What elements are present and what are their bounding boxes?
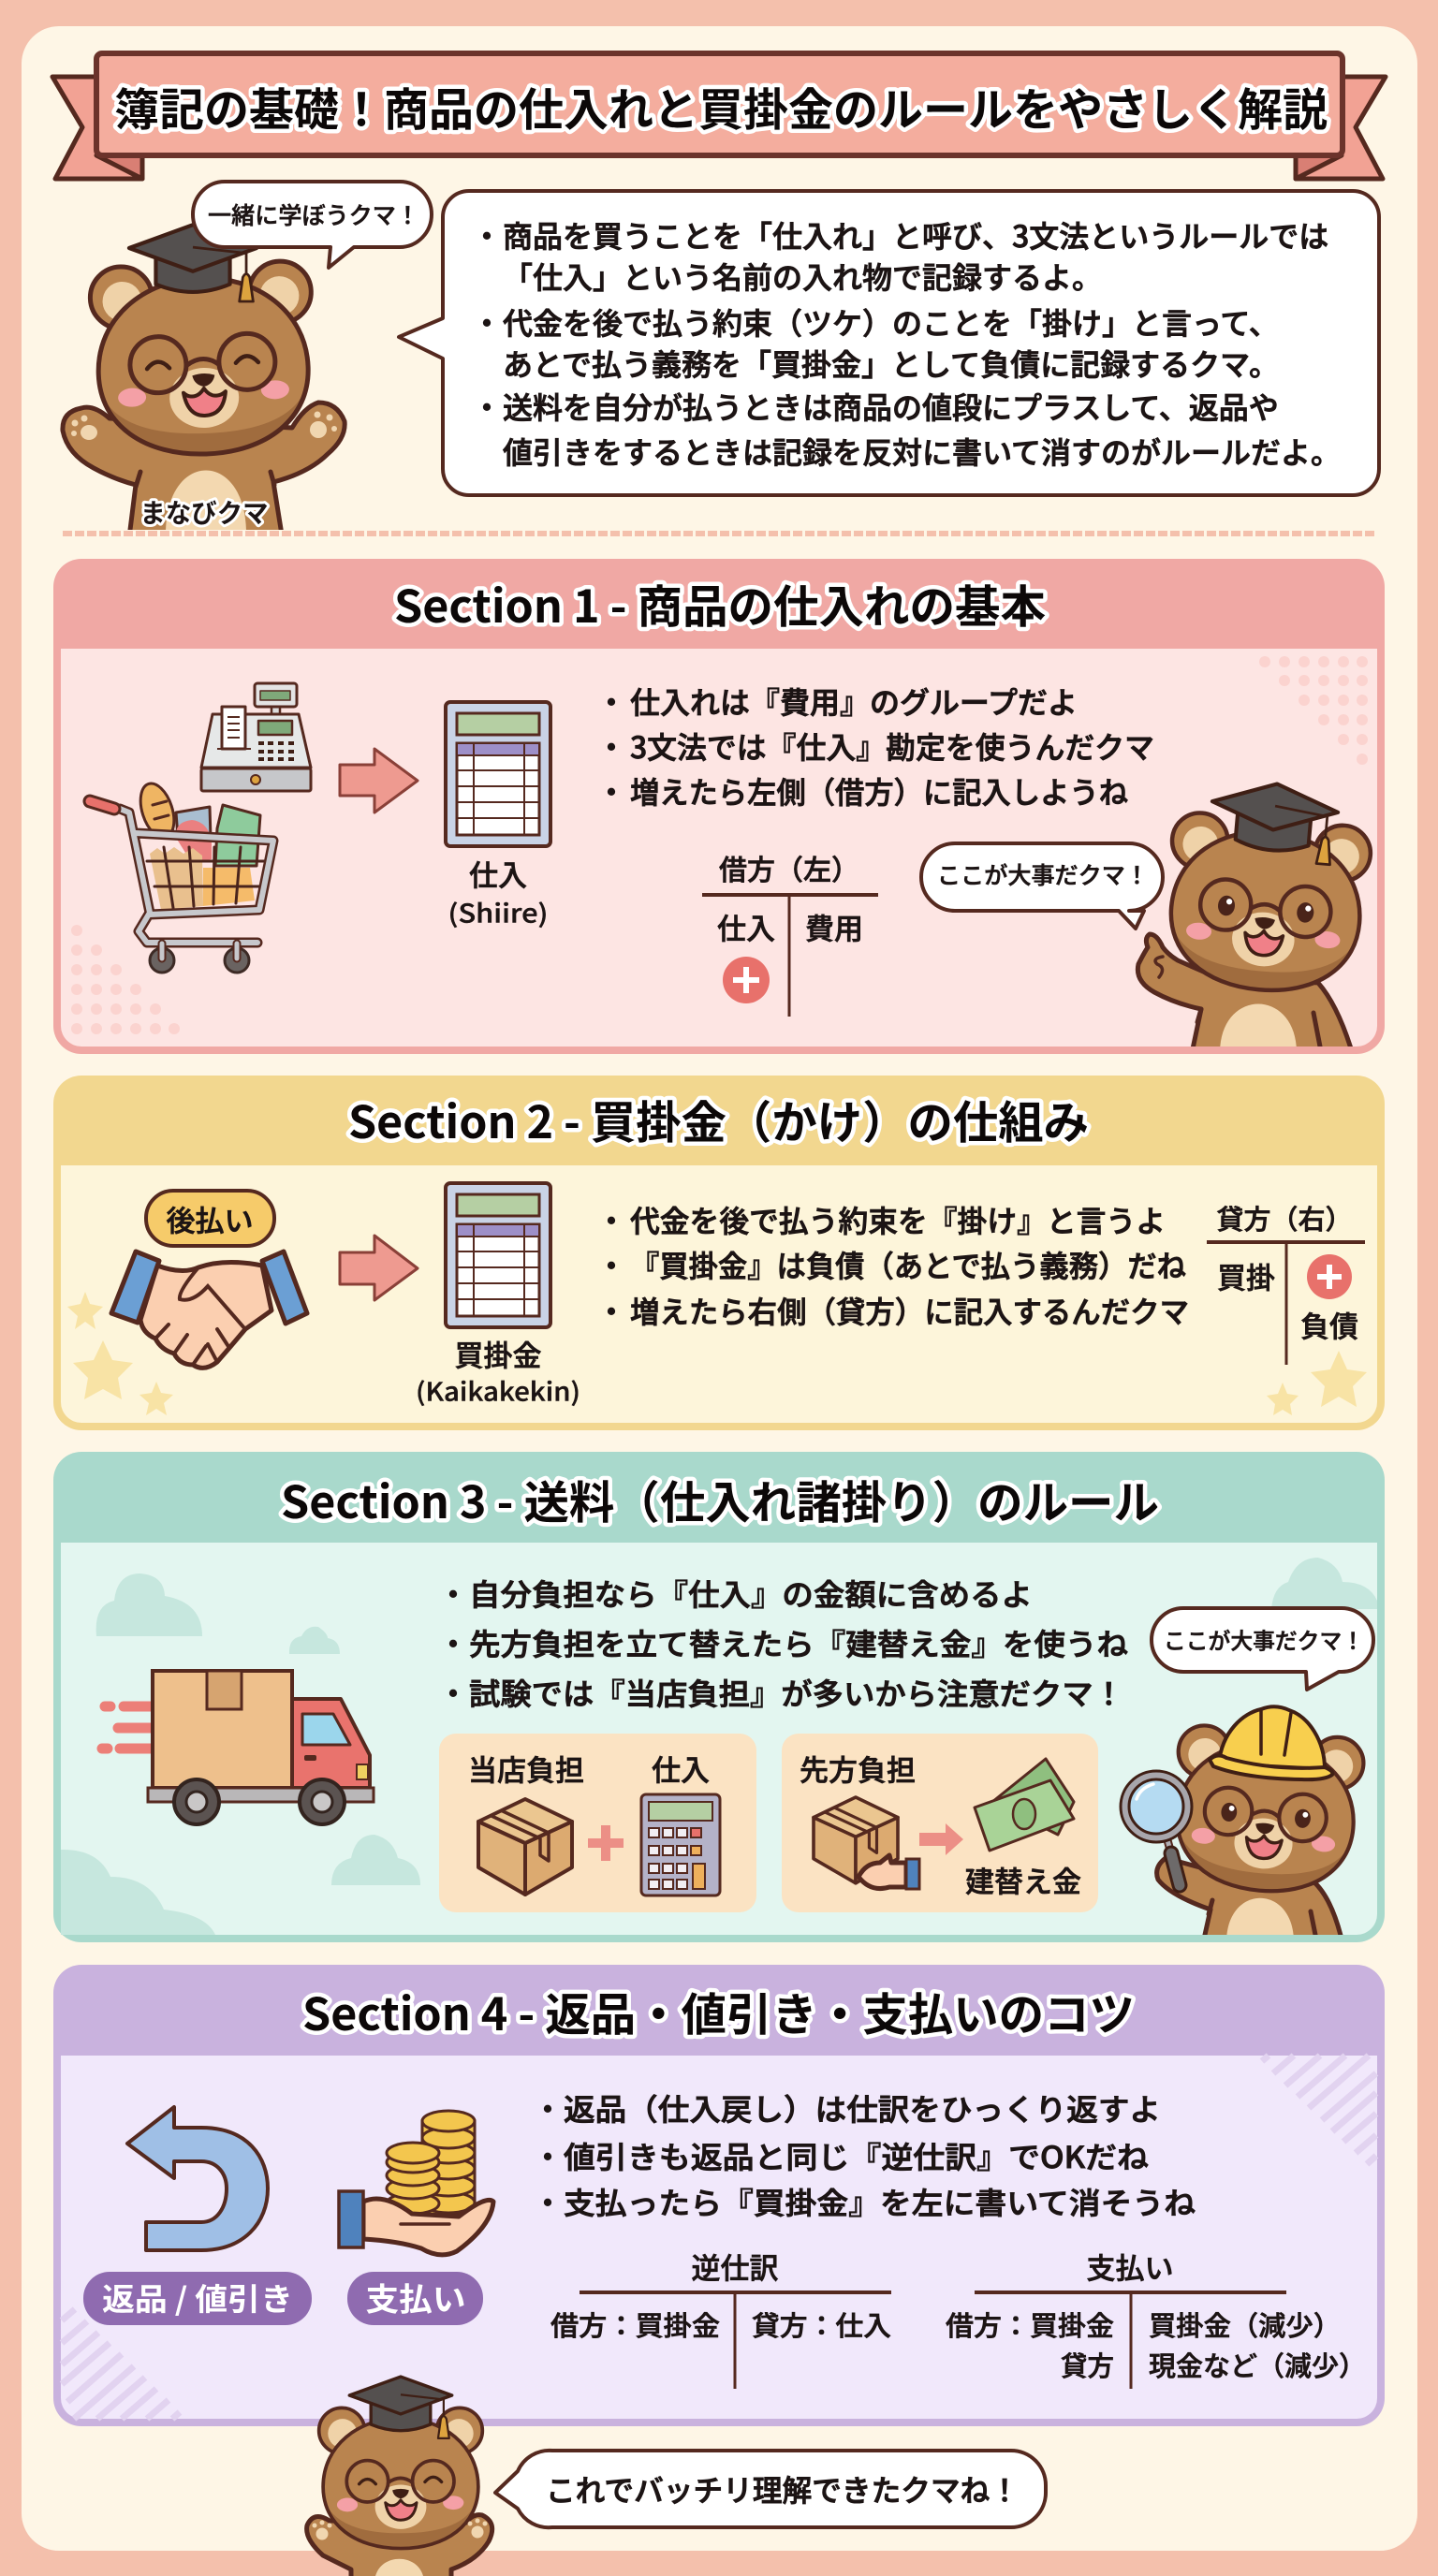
bullets: 試験では『当店負担』が多いから注意だクマ！ xyxy=(469,1671,1124,1714)
T account: payment: 支払い xyxy=(1086,2245,1174,2288)
arrow xyxy=(340,1236,418,1300)
mascot: manabi bear xyxy=(63,225,345,552)
speech bubble: let's learn: 一緒に学ぼうクマ！ xyxy=(208,198,419,231)
T account: payment: 現金など（減少） xyxy=(1149,2345,1366,2384)
pill: payment xyxy=(347,2272,483,2325)
icon: return arrow xyxy=(127,2107,268,2250)
T account: reverse entry xyxy=(550,2245,891,2389)
speech bubble: let's learn xyxy=(193,182,432,268)
bullets: ・ xyxy=(596,1289,626,1332)
T account: credit: 買掛 xyxy=(1217,1254,1275,1297)
bullets: 増えたら左側（借方）に記入しようね xyxy=(630,769,1128,812)
name label: まなびクマ xyxy=(140,493,268,531)
title text: 簿記の基礎！商品の仕入れと買掛金のルールをやさしく解説 xyxy=(114,73,1328,139)
bullets: 代金を後で払う約束を『掛け』と言うよ xyxy=(630,1198,1166,1241)
T account: reverse entry: 借方：買掛金 xyxy=(550,2305,720,2344)
intro speech bubble: 代金を後で払う約束（ツケ）のことを「掛け」と言って、 xyxy=(503,300,1279,344)
mascot: closing bear xyxy=(307,2377,492,2576)
speech bubble: ここが大事だクマ！ xyxy=(1164,1623,1364,1655)
pill: deferred payment xyxy=(146,1191,274,1246)
intro speech bubble xyxy=(399,191,1379,495)
panel: section 3 xyxy=(53,1452,1385,1952)
pill: returns and discounts: 返品 / 値引き xyxy=(102,2275,293,2320)
icon: cash register xyxy=(201,683,311,791)
ledger label: 買掛金 xyxy=(455,1333,541,1374)
intro speech bubble: 商品を買うことを「仕入れ」と呼び、3文法というルールでは xyxy=(503,213,1328,256)
card: other party expense: 先方負担 xyxy=(800,1747,916,1790)
bullets: ・ xyxy=(596,1198,626,1241)
icon: shopping cart xyxy=(90,780,273,973)
bullets xyxy=(533,2086,1196,2223)
bullets: ・ xyxy=(596,680,626,723)
bullets: 3文法では『仕入』勘定を使うんだクマ xyxy=(630,724,1154,768)
card: own expense: 当店負担 xyxy=(468,1747,584,1790)
arrow xyxy=(340,749,418,812)
mascot: bear with helmet and magnifier xyxy=(1121,1706,1366,1952)
icon: coins in hand xyxy=(339,2111,493,2255)
icon: delivery truck xyxy=(102,1671,374,1824)
bullets: 値引きも返品と同じ『逆仕訳』でOKだね xyxy=(564,2134,1149,2177)
ledger label xyxy=(448,852,549,930)
card: other party expense xyxy=(782,1734,1098,1912)
bullets: ・ xyxy=(438,1621,468,1664)
intro speech bubble: あとで払う義務を「買掛金」として負債に記録するクマ。 xyxy=(503,342,1279,385)
bullets: 『買掛金』は負債（あとで払う義務）だね xyxy=(630,1243,1186,1286)
bullets: 先方負担を立て替えたら『建替え金』を使うね xyxy=(469,1621,1128,1664)
T account: payment: 貸方 xyxy=(1061,2345,1114,2384)
intro speech bubble: ・ xyxy=(472,213,502,256)
T account: payment: 買掛金（減少） xyxy=(1149,2305,1341,2344)
bullets xyxy=(596,680,1154,812)
T account: credit: 負債 xyxy=(1300,1303,1358,1346)
T account: debit: 借方（左） xyxy=(719,847,859,888)
intro speech bubble: ・ xyxy=(472,385,502,428)
mascot: pointing bear xyxy=(1137,779,1372,1058)
card: other party expense: 建替え金 xyxy=(965,1859,1081,1900)
T account: debit: 仕入 xyxy=(717,906,775,947)
bullets: 増えたら右側（貸方）に記入するんだクマ xyxy=(630,1289,1189,1332)
panel: section 2 xyxy=(53,1076,1385,1430)
bullets xyxy=(596,1198,1189,1332)
bullets: ・ xyxy=(533,2134,563,2177)
icon: ledger xyxy=(446,702,550,846)
panel: section 4 xyxy=(53,1965,1385,2426)
bullets: ・ xyxy=(596,769,626,812)
heading: section 2: Section 2 - 買掛金（かけ）の仕組み xyxy=(348,1086,1089,1151)
ledger label: (Shiire) xyxy=(448,893,549,930)
T account: credit: 貸方（右） xyxy=(1216,1198,1353,1237)
title banner xyxy=(52,53,1386,179)
T account: payment xyxy=(946,2245,1366,2389)
T account: debit xyxy=(702,847,878,1017)
T account: debit: 費用 xyxy=(805,906,863,947)
pill: payment: 支払い xyxy=(365,2275,466,2320)
card: own expense: 仕入 xyxy=(652,1747,710,1790)
bullets: ・ xyxy=(438,1572,468,1615)
bullets: 返品（仕入戻し）は仕訳をひっくり返すよ xyxy=(564,2086,1161,2130)
bullets: 仕入れは『費用』のグループだよ xyxy=(630,680,1078,723)
ledger label: 仕入 xyxy=(469,852,527,895)
T account: reverse entry: 逆仕訳 xyxy=(691,2245,779,2288)
bullets: ・ xyxy=(596,724,626,768)
ledger label xyxy=(416,1333,580,1408)
bullets: ・ xyxy=(533,2180,563,2223)
speech bubble xyxy=(921,843,1163,929)
intro speech bubble: ・ xyxy=(472,300,502,344)
speech bubble xyxy=(1152,1608,1373,1690)
bullets: 自分負担なら『仕入』の金額に含めるよ xyxy=(469,1572,1033,1615)
bullets: 支払ったら『買掛金』を左に書いて消そうね xyxy=(564,2180,1196,2223)
T account: payment: 借方：買掛金 xyxy=(946,2305,1114,2344)
T account: reverse entry: 貸方：仕入 xyxy=(752,2305,891,2344)
heading: section 1: Section 1 - 商品の仕入れの基本 xyxy=(394,570,1046,636)
T account: credit xyxy=(1207,1198,1365,1365)
pill: returns and discounts xyxy=(83,2272,312,2325)
panel: section 1 xyxy=(53,559,1385,1058)
icon: handshake xyxy=(111,1251,307,1368)
speech bubble: ここが大事だクマ！ xyxy=(937,857,1149,891)
intro speech bubble: 「仕入」という名前の入れ物で記録するよ。 xyxy=(503,255,1102,298)
bullets: ・ xyxy=(596,1243,626,1286)
closing speech bubble: これでバッチリ理解できたクマね！ xyxy=(546,2467,1020,2510)
heading: section 3: Section 3 - 送料（仕入れ諸掛り）のルール xyxy=(281,1466,1159,1531)
bullets: ・ xyxy=(533,2086,563,2130)
ledger label: (Kaikakekin) xyxy=(416,1372,580,1408)
bullets: ・ xyxy=(438,1671,468,1714)
closing speech bubble xyxy=(495,2451,1046,2527)
bullets xyxy=(438,1572,1128,1714)
icon: ledger xyxy=(446,1183,550,1327)
heading: section 4: Section 4 - 返品・値引き・支払いのコツ xyxy=(302,1978,1135,2043)
intro speech bubble: 送料を自分が払うときは商品の値段にプラスして、返品や xyxy=(503,385,1279,428)
card: own expense xyxy=(439,1734,756,1912)
pill: deferred payment: 後払い xyxy=(167,1198,253,1239)
intro speech bubble: 値引きをするときは記録を反対に書いて消すのがルールだよ。 xyxy=(503,430,1341,473)
